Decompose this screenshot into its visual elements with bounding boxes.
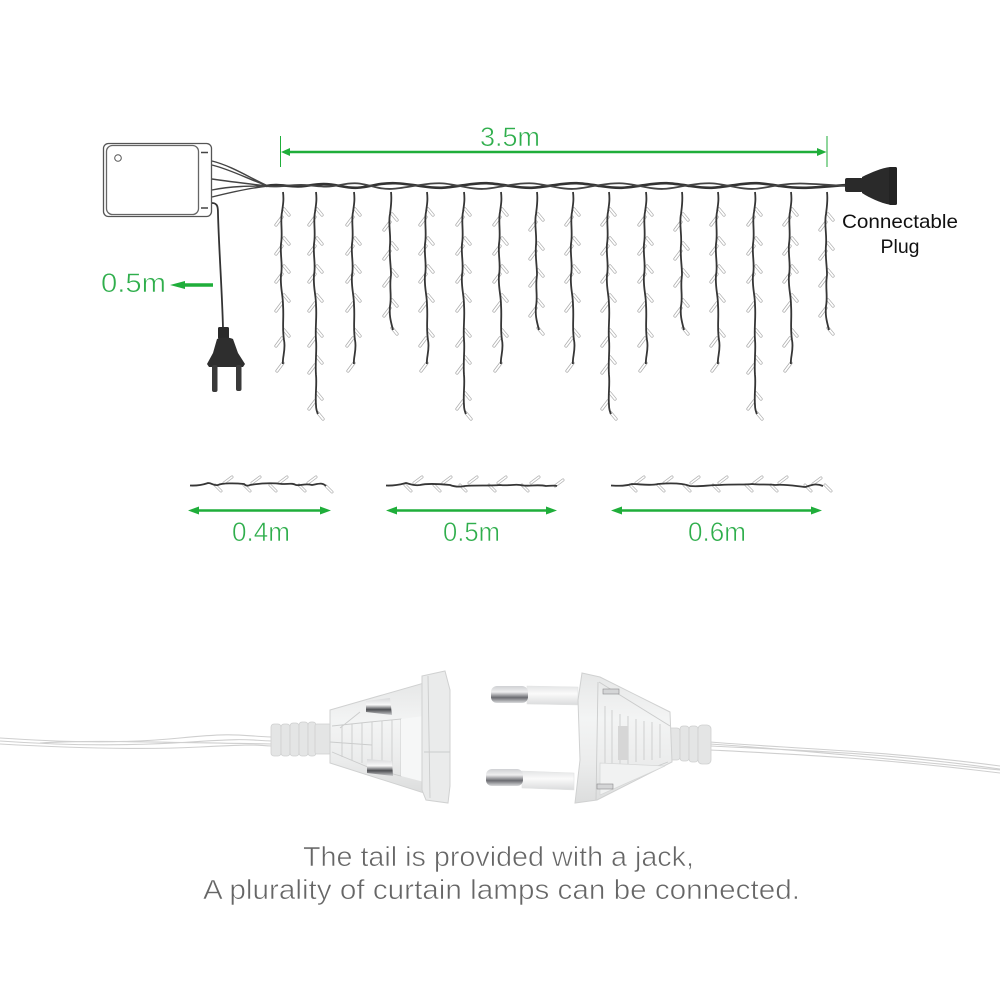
label: connectable plug [842, 211, 958, 258]
LED spacing: 0.6m [611, 477, 831, 547]
metal clips [366, 698, 392, 715]
LED spacing: 0.6m: 0.6m [688, 517, 746, 547]
hanging LED strands [276, 192, 833, 419]
photo: transparent plug with pins and cord [486, 673, 1000, 803]
cord left [0, 735, 272, 748]
strain relief ridges [668, 725, 711, 764]
LED spacing: 0.5m [386, 477, 563, 547]
LED spacing: 0.4m: 0.4m [232, 517, 290, 547]
socket flange [422, 671, 450, 803]
pins [486, 686, 578, 790]
strain relief ridges [271, 722, 331, 756]
caption: The tail is provided with a jack, [303, 841, 694, 872]
LED spacing: 0.4m [188, 477, 332, 547]
metal clips [603, 689, 619, 694]
icon: EU plug [207, 327, 245, 392]
plug body [575, 673, 672, 803]
dimension: 3.5m [280, 122, 827, 167]
label: connectable plug: Plug [880, 236, 920, 258]
controller box with wires [104, 144, 268, 216]
dimension: 0.5m cord [101, 268, 213, 298]
socket body [330, 683, 424, 793]
dimension: 3.5m: 3.5m [480, 122, 540, 152]
photo: transparent socket with cord [0, 671, 450, 803]
main wire with connectable socket [266, 167, 897, 205]
dimension: 0.5m cord: 0.5m [101, 268, 166, 298]
caption: A plurality of curtain lamps can be connected. [203, 874, 800, 905]
LED spacing: 0.5m: 0.5m [443, 517, 500, 547]
label: connectable plug: Connectable [842, 211, 958, 233]
power cord with plug [207, 203, 245, 392]
caption [203, 841, 800, 905]
cord right [710, 742, 1000, 773]
icon: socket [845, 167, 897, 205]
